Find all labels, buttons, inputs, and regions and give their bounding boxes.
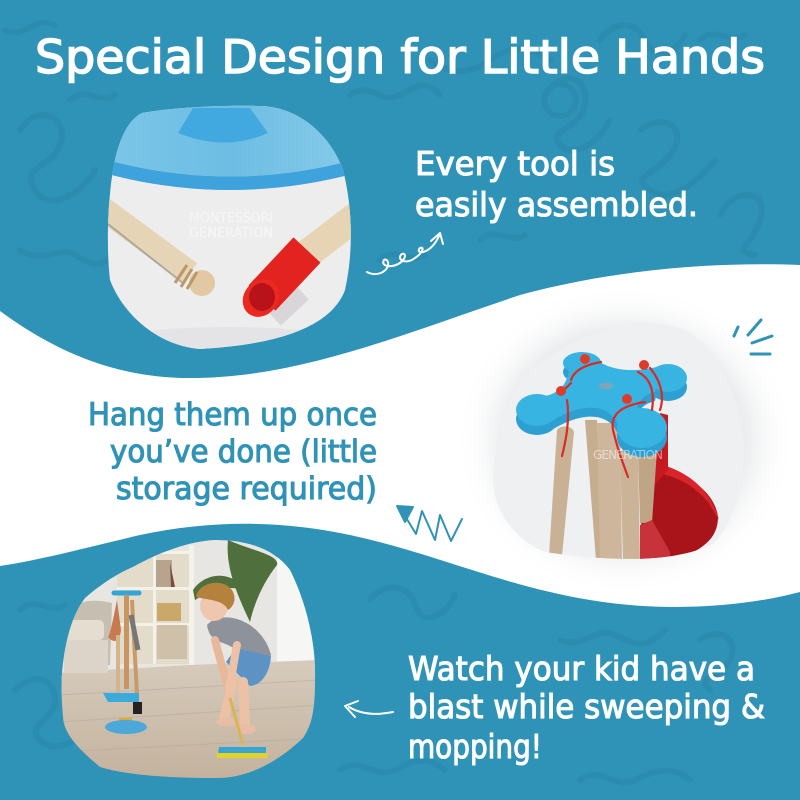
blue base disc edge bbox=[112, 162, 344, 190]
title: Special Design for Little Hands bbox=[35, 30, 765, 84]
arrow: squiggle up to text bbox=[367, 233, 443, 274]
text: hang them up: you’ve done (little bbox=[110, 434, 377, 470]
blue base disc top bbox=[114, 106, 340, 176]
text: hang them up: storage required) bbox=[116, 471, 377, 507]
red ropes bbox=[562, 362, 662, 477]
wooden handle with red socket bbox=[235, 212, 362, 324]
plant bbox=[193, 540, 277, 622]
arrow: pointing to photo bbox=[345, 701, 393, 717]
watermark line 2: GENERATION bbox=[189, 226, 273, 241]
wooden handle, threaded end bbox=[102, 208, 215, 296]
text: every tool: easily assembled. bbox=[415, 185, 698, 224]
photo blob: assembling the tool handle bbox=[108, 106, 351, 349]
boy bbox=[196, 583, 271, 734]
tool stand bbox=[103, 593, 147, 734]
screw bbox=[599, 382, 613, 390]
floor bbox=[55, 660, 320, 782]
text: every tool bbox=[415, 144, 698, 224]
text: watch your kid: mopping! bbox=[408, 727, 542, 766]
dustpan bbox=[640, 474, 718, 559]
rope knots bbox=[556, 354, 649, 404]
text: watch your kid bbox=[408, 649, 765, 766]
red brush bbox=[640, 520, 670, 559]
photo blob: kid sweeping bbox=[55, 535, 320, 782]
watermark: GENERATION bbox=[593, 448, 663, 462]
floor shading bbox=[150, 327, 300, 349]
wooden sticks bbox=[549, 426, 574, 556]
sofa bbox=[64, 601, 112, 673]
hanger top bbox=[516, 352, 687, 448]
photo blob: hanging tools bbox=[493, 352, 727, 559]
text: hang them up: Hang them up once bbox=[88, 397, 377, 433]
halo behind photo bbox=[455, 285, 795, 595]
mop bbox=[217, 698, 268, 758]
burst lines bbox=[734, 320, 772, 354]
blue cone bbox=[178, 108, 268, 142]
text: watch your kid: Watch your kid have a bbox=[408, 649, 755, 688]
arrow: zigzag bbox=[397, 506, 462, 541]
text: every tool: Every tool is bbox=[415, 144, 615, 183]
door frame bbox=[277, 557, 315, 662]
white wave band bbox=[0, 264, 800, 607]
text: watch your kid: blast while sweeping & bbox=[408, 687, 765, 726]
bookshelf bbox=[117, 545, 194, 665]
watermark: MONTESSORI bbox=[189, 211, 273, 226]
hanger side bbox=[516, 361, 687, 457]
text: hang them up bbox=[88, 397, 377, 507]
